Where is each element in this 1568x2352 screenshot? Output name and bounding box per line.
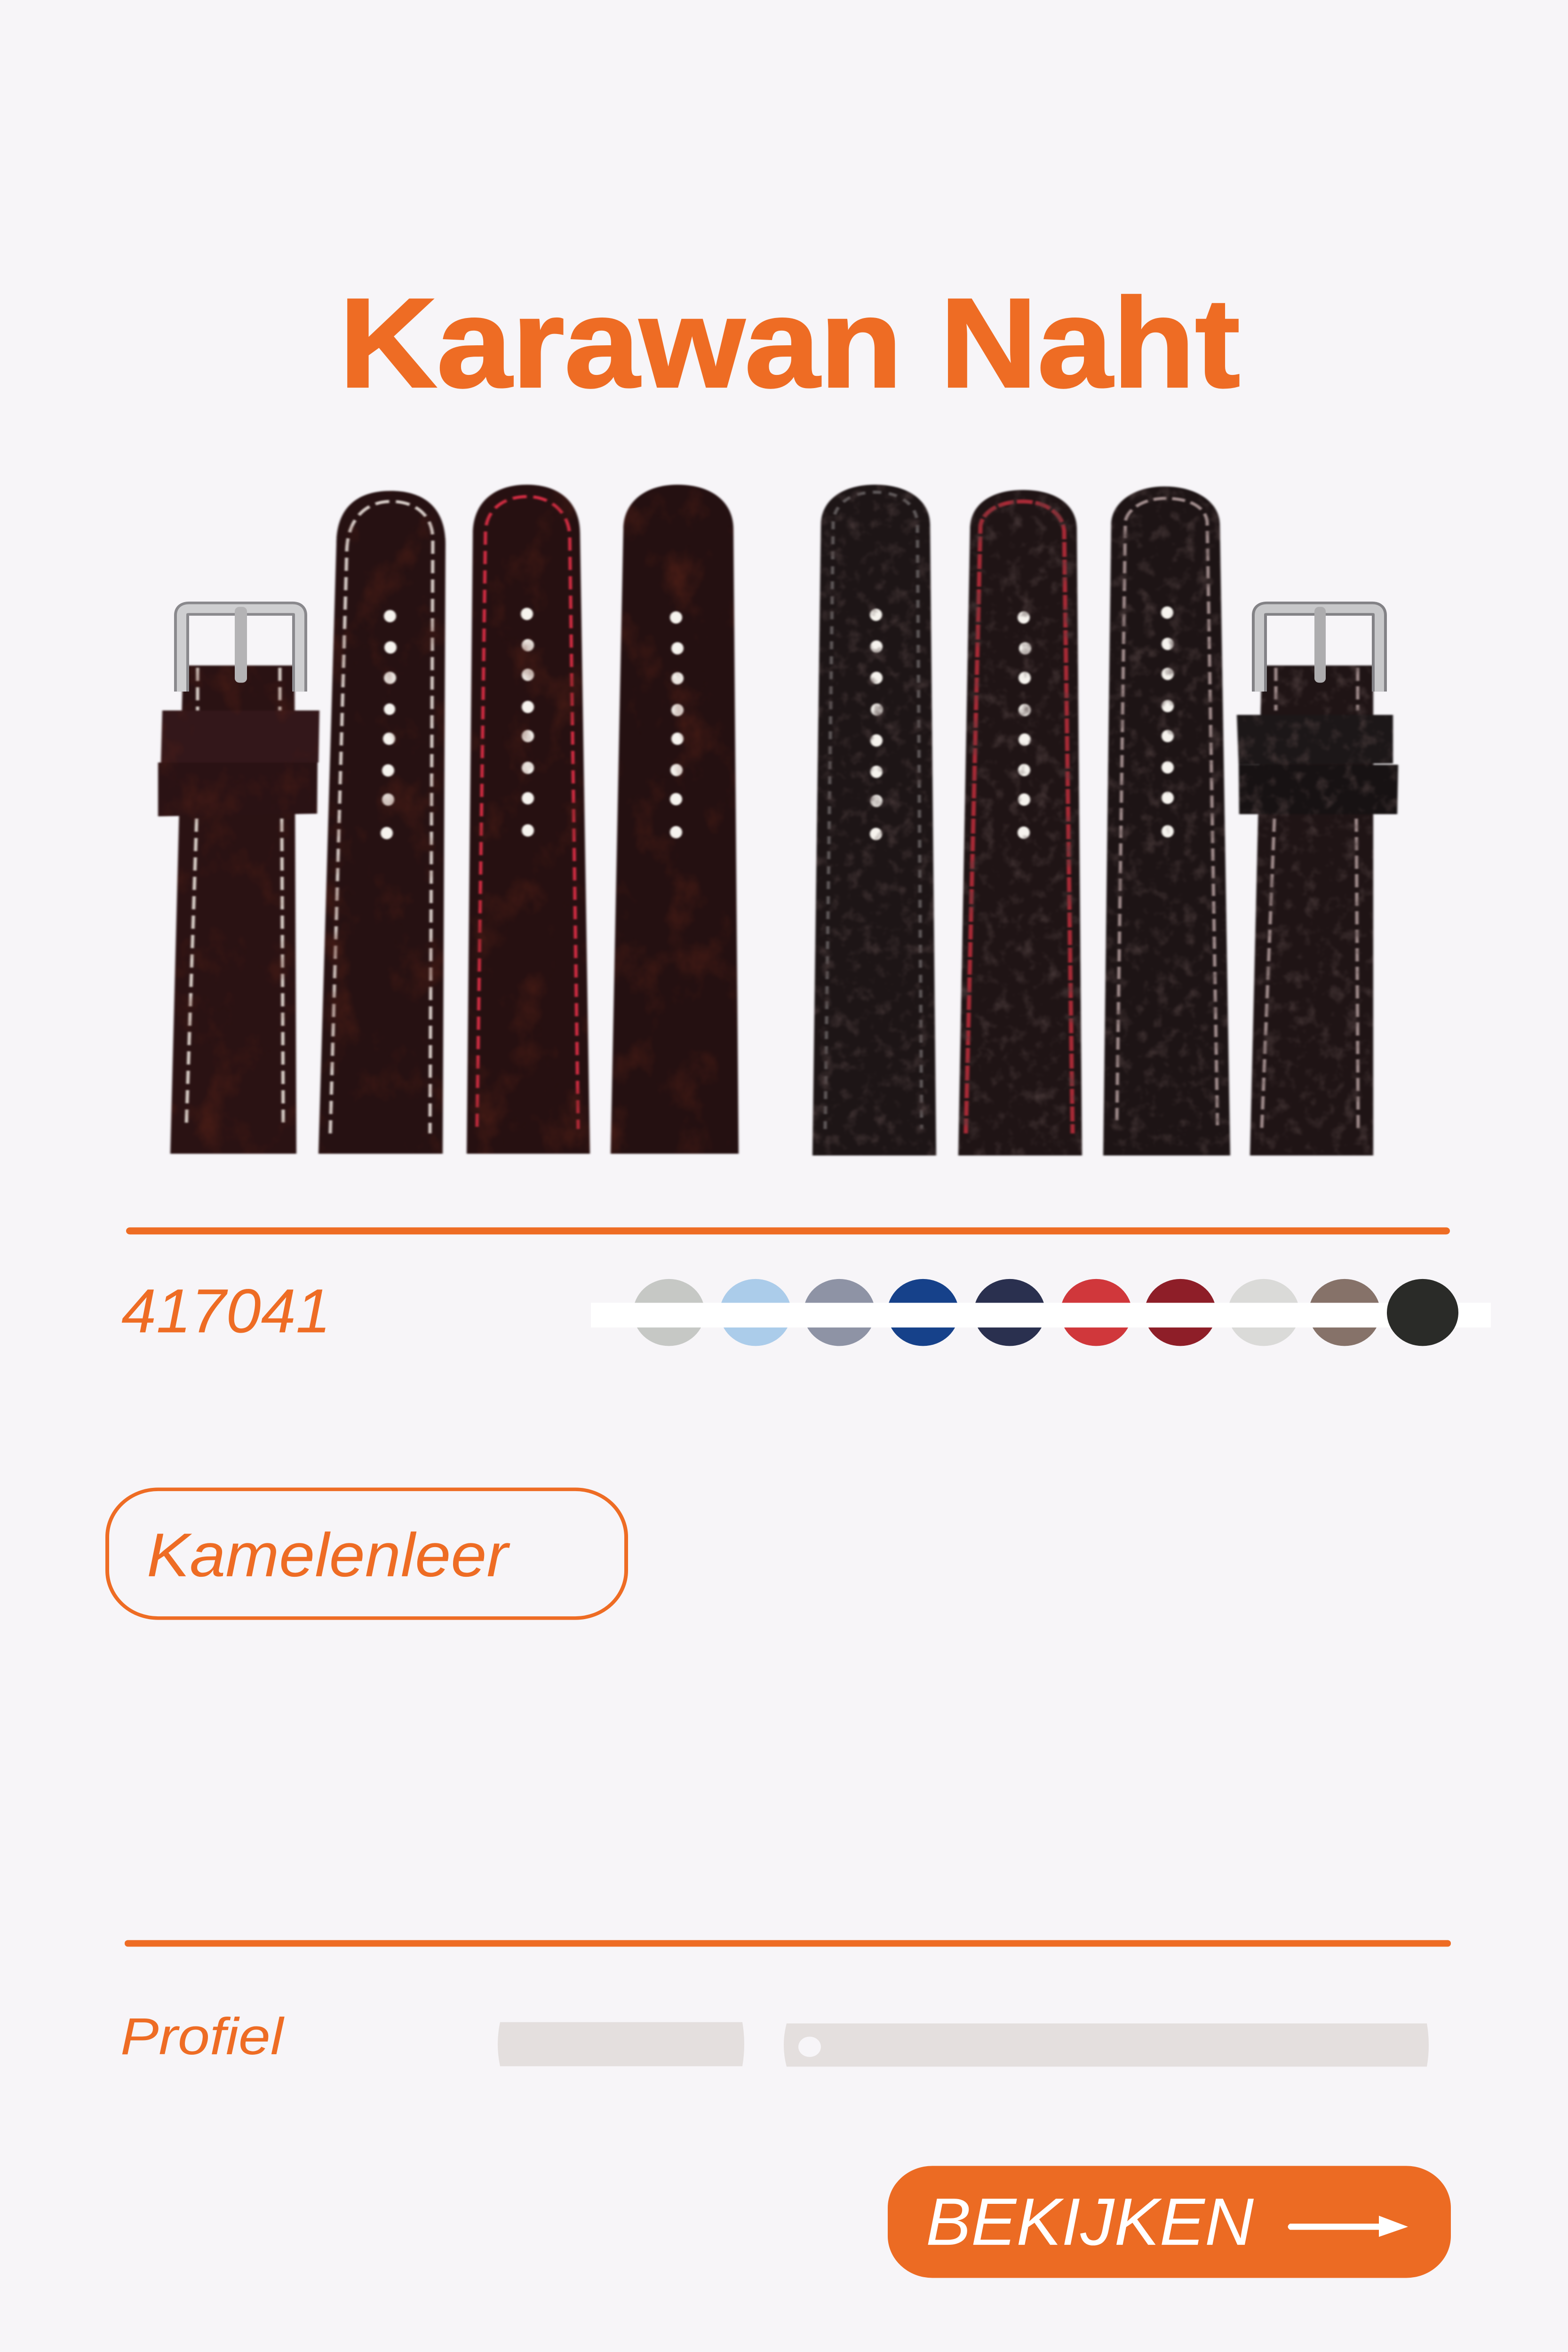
profile bar short <box>498 2022 744 2066</box>
profile hole <box>798 2037 821 2057</box>
button label: BEKIJKEN <box>926 2185 1254 2259</box>
strap 3: red stitching <box>467 485 590 1154</box>
strap 8: buckle piece grey-pink stitching <box>1237 666 1398 1155</box>
swatch circles <box>633 1279 1380 1346</box>
swatch black <box>1387 1279 1458 1346</box>
title: Karawan Naht <box>339 272 1240 414</box>
strap 4: tonal stitching <box>611 485 739 1154</box>
icon: arrow <box>1288 2216 1408 2237</box>
tag text: Kamelenleer <box>147 1520 510 1589</box>
material tag <box>107 1489 626 1618</box>
divider rule bottom <box>125 1940 1451 1947</box>
strap 1: buckle piece white stitching <box>158 666 319 1154</box>
colour swatches <box>591 1279 1491 1346</box>
left buckle <box>182 607 300 691</box>
profile bar long <box>784 2024 1429 2066</box>
strap group: dark stitched straps <box>812 485 1398 1155</box>
button: bekijken <box>888 2166 1451 2278</box>
article number: 417041 <box>121 1276 331 1345</box>
tag outline <box>107 1489 626 1618</box>
profile diagram <box>498 2022 1429 2066</box>
profile label: Profiel <box>120 2008 285 2066</box>
strap 7: grey-pink stitching <box>1103 486 1230 1155</box>
white band <box>591 1303 1491 1327</box>
right buckle <box>1259 607 1379 691</box>
button background <box>888 2166 1451 2278</box>
strap group: brown stitched straps <box>158 485 739 1154</box>
strap 5: grey stitching <box>812 485 936 1155</box>
strap 6: dark red stitching <box>958 490 1082 1155</box>
strap 2: white stitching <box>318 491 446 1154</box>
divider rule top <box>126 1227 1450 1234</box>
product photo: watch straps <box>158 485 1398 1155</box>
